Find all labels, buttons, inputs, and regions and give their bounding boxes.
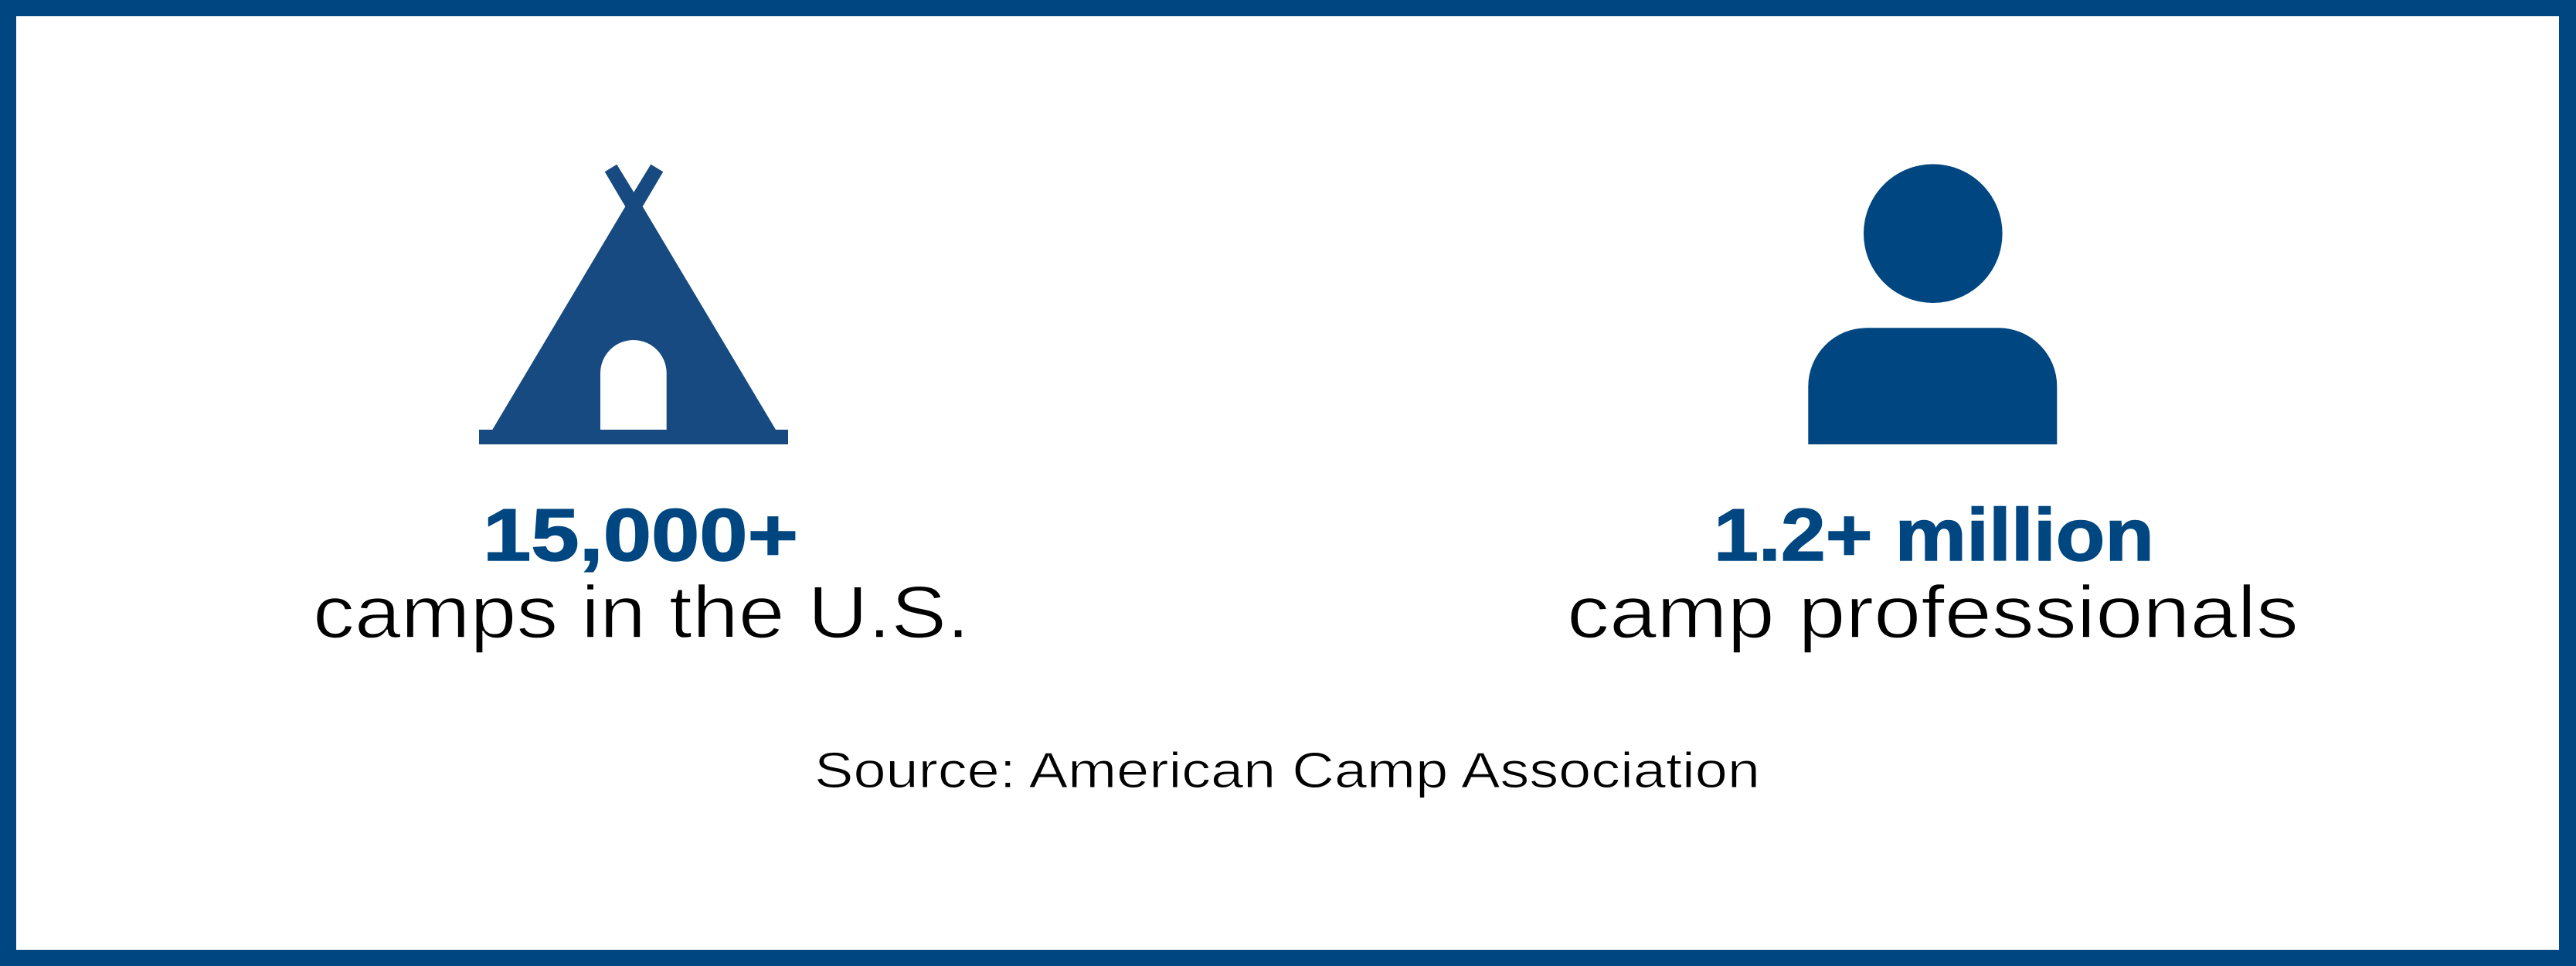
person body xyxy=(1808,328,2057,444)
person head xyxy=(1864,164,2003,303)
label: camps in the U.S.: camps in the U.S. xyxy=(313,571,970,654)
label: camp professionals: camp professionals xyxy=(1567,571,2299,654)
icon: tent xyxy=(479,165,788,444)
stat: 15,000+: 15,000+ xyxy=(483,494,798,577)
icon: person xyxy=(1808,164,2057,444)
source note: Source: American Camp Association xyxy=(814,742,1760,798)
stat: 1.2+ million: 1.2+ million xyxy=(1714,494,2154,577)
panel: camp professionals statistic xyxy=(1567,164,2299,654)
panel: camps statistic xyxy=(313,165,970,654)
